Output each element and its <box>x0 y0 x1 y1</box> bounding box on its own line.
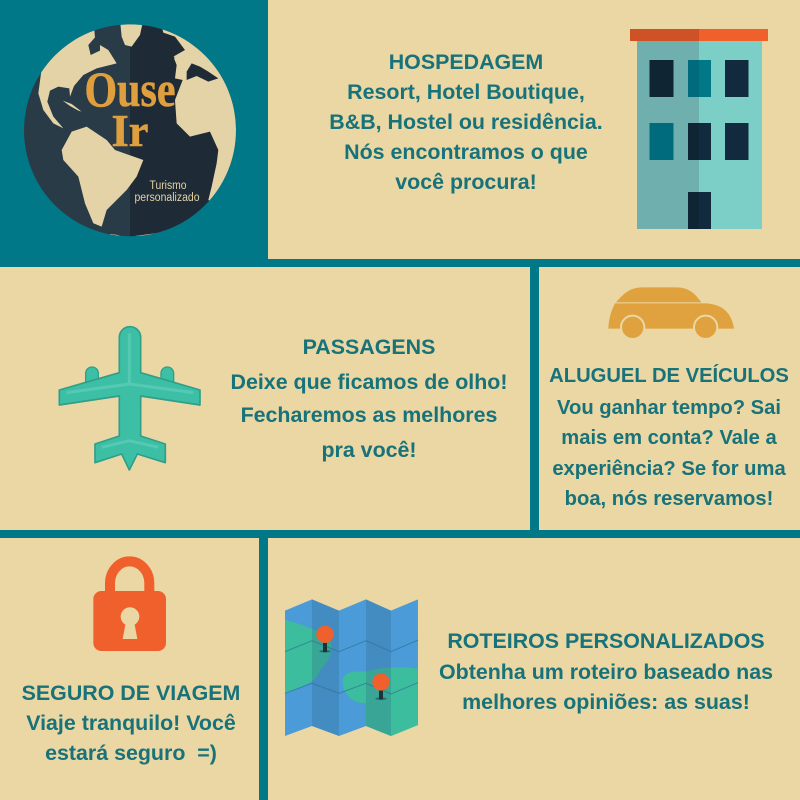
text: passagens: PASSAGENS <box>303 335 435 359</box>
panel: hospedagem <box>268 0 800 259</box>
panel: passagens <box>0 267 530 530</box>
text: passagens: Fecharemos as melhores <box>241 403 498 427</box>
icon: hotel building <box>630 29 768 229</box>
logo text: tagline: Turismo <box>150 180 186 192</box>
text: seguro de viagem <box>22 681 240 765</box>
text: aluguel de veiculos: boa, nós reservamos! <box>565 488 773 510</box>
text: aluguel de veiculos <box>549 364 789 510</box>
text: hospedagem: B&B, Hostel ou residência. <box>329 110 603 134</box>
text: passagens: Deixe que ficamos de olho! <box>231 370 507 394</box>
panel: aluguel de veiculos <box>539 267 800 530</box>
text: roteiros personalizados: ROTEIROS PERSONALIZADOS <box>447 629 765 653</box>
icon: airplane <box>59 327 200 470</box>
text: aluguel de veiculos: mais em conta? Vale a <box>561 427 777 449</box>
icon: padlock <box>93 561 166 651</box>
text: aluguel de veiculos: Vou ganhar tempo? Sai <box>557 397 781 419</box>
text: roteiros personalizados: Obtenha um roteiro baseado nas <box>439 660 773 684</box>
logo text: Ir: Ir <box>112 105 148 156</box>
icon: car <box>608 287 734 339</box>
text: passagens: pra você! <box>321 438 417 462</box>
logo text: Ouse: Ouse <box>84 61 176 117</box>
panel: seguro de viagem <box>0 538 259 800</box>
text: passagens <box>231 335 507 462</box>
logo: globe <box>24 24 236 236</box>
globe illustration <box>24 24 236 236</box>
logo text: tagline <box>134 180 200 204</box>
icon: folded map <box>285 599 418 736</box>
text: aluguel de veiculos: ALUGUEL DE VEÍCULOS <box>549 364 789 387</box>
logo text: tagline: personalizado <box>134 192 200 204</box>
text: hospedagem: HOSPEDAGEM <box>389 50 543 74</box>
text: aluguel de veiculos: experiência? Se for uma <box>552 458 786 480</box>
panel: roteiros personalizados <box>268 538 800 800</box>
text: roteiros personalizados: melhores opiniões: as suas! <box>462 690 750 714</box>
text: hospedagem: você procura! <box>395 170 537 194</box>
text: seguro de viagem: Viaje tranquilo! Você <box>26 711 236 735</box>
text: roteiros personalizados <box>439 629 773 714</box>
text: hospedagem: Nós encontramos o que <box>344 140 588 164</box>
text: hospedagem <box>329 50 603 194</box>
text: hospedagem: Resort, Hotel Boutique, <box>347 80 585 104</box>
text: seguro de viagem: estará seguro =) <box>45 741 217 765</box>
text: seguro de viagem: SEGURO DE VIAGEM <box>22 681 240 705</box>
